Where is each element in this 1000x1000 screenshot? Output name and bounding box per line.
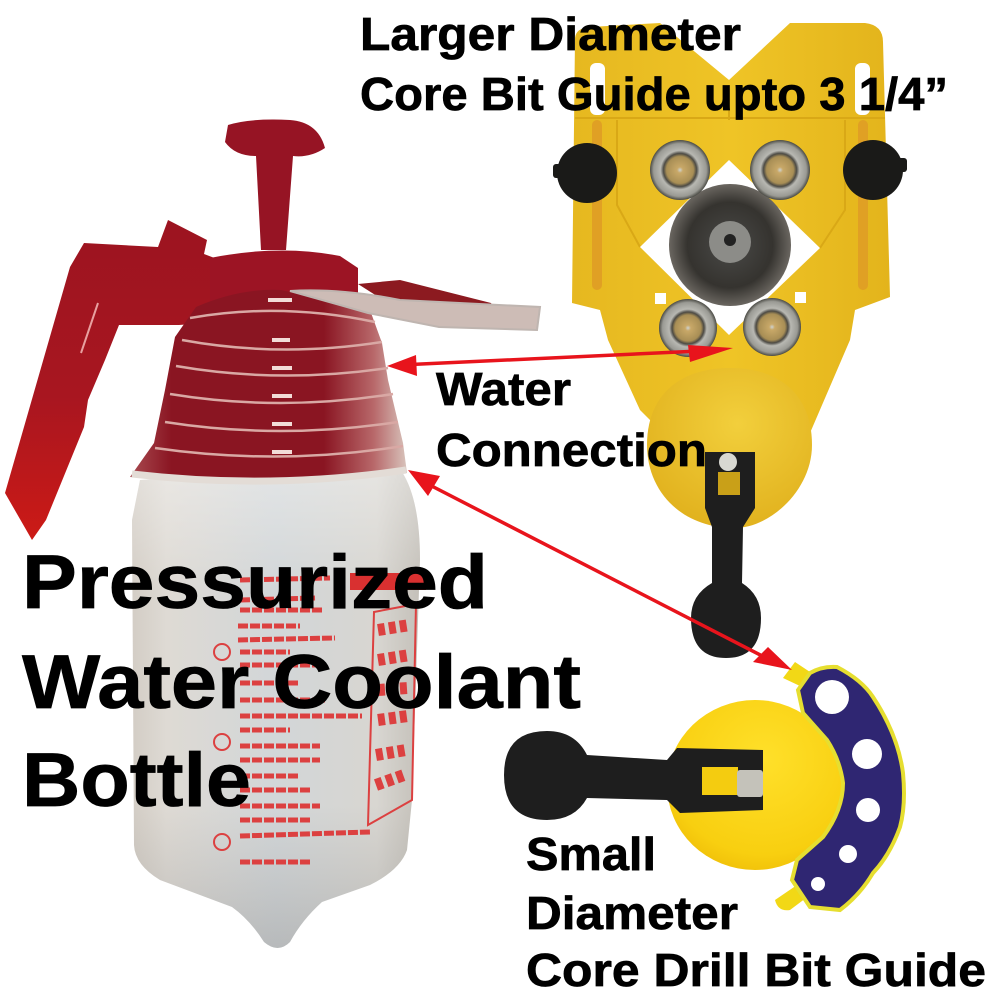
bearings [650, 140, 710, 200]
yellow plate [572, 23, 890, 500]
bottle label printing [214, 573, 426, 862]
heading: core bit guide: Core Bit Guide upto 3 1/4” [360, 68, 948, 120]
panel: pressurized water coolant bottle [5, 120, 540, 948]
panel: larger diameter core bit guide [553, 23, 907, 658]
chrome arbor disc [669, 184, 791, 306]
title: bottle: Bottle [22, 738, 251, 823]
black handle [691, 452, 761, 658]
suction cup [647, 368, 812, 528]
label: connection: Connection [436, 424, 707, 476]
black handle [504, 731, 763, 820]
coiled tube neck [130, 290, 407, 481]
label: small: Small [526, 828, 656, 880]
yellow suction cup [667, 700, 843, 870]
arrow: bottle to small guide [408, 470, 792, 670]
pump plunger and head [210, 120, 495, 310]
label: core drill bit guide: Core Drill Bit Guide [526, 944, 986, 996]
guide slots [575, 63, 885, 304]
title: water coolant: Water Coolant [22, 640, 581, 725]
guide holes [811, 680, 882, 891]
arrow: water connection [387, 345, 733, 376]
white diamond window [640, 160, 820, 335]
trigger handle [5, 220, 225, 540]
guide tabs [783, 662, 810, 686]
label: water: Water [436, 363, 571, 415]
heading: larger diameter: Larger Diameter [360, 8, 741, 60]
title: pressurized: Pressurized [22, 540, 488, 625]
label: diameter: Diameter [526, 887, 738, 939]
black knobs [553, 140, 907, 203]
bottle body [132, 472, 420, 948]
outlet tube [290, 290, 540, 330]
panel: small diameter core drill bit guide [504, 662, 904, 910]
purple arc guide [792, 667, 904, 910]
